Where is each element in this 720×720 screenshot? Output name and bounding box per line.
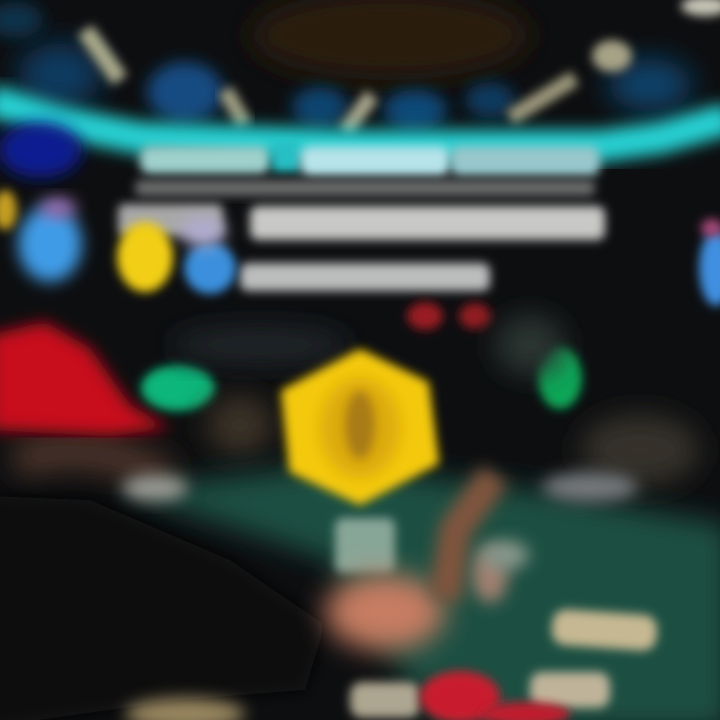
heading: third line <box>240 263 490 291</box>
dark foreground figure <box>0 495 325 720</box>
heading: first line <box>140 142 600 176</box>
background figures <box>170 315 700 486</box>
icon: green chip right <box>538 347 582 409</box>
hands <box>325 475 529 650</box>
icon: right blue tile <box>699 219 720 306</box>
icon: left blue tile <box>0 122 82 282</box>
cyan neon band <box>0 100 720 146</box>
chips on table <box>122 472 638 573</box>
heading: second line <box>118 180 605 240</box>
red chips <box>420 671 570 720</box>
background: casino ceiling <box>0 0 720 132</box>
icon: green chip left <box>141 365 215 411</box>
player in red shirt <box>0 322 170 436</box>
left forearm <box>15 452 170 480</box>
icon: yellow hexagon coin <box>284 352 436 502</box>
icon: yellow and blue chips <box>117 217 236 294</box>
green poker table <box>120 465 720 720</box>
playing cards <box>125 608 658 720</box>
red accent <box>407 302 491 330</box>
